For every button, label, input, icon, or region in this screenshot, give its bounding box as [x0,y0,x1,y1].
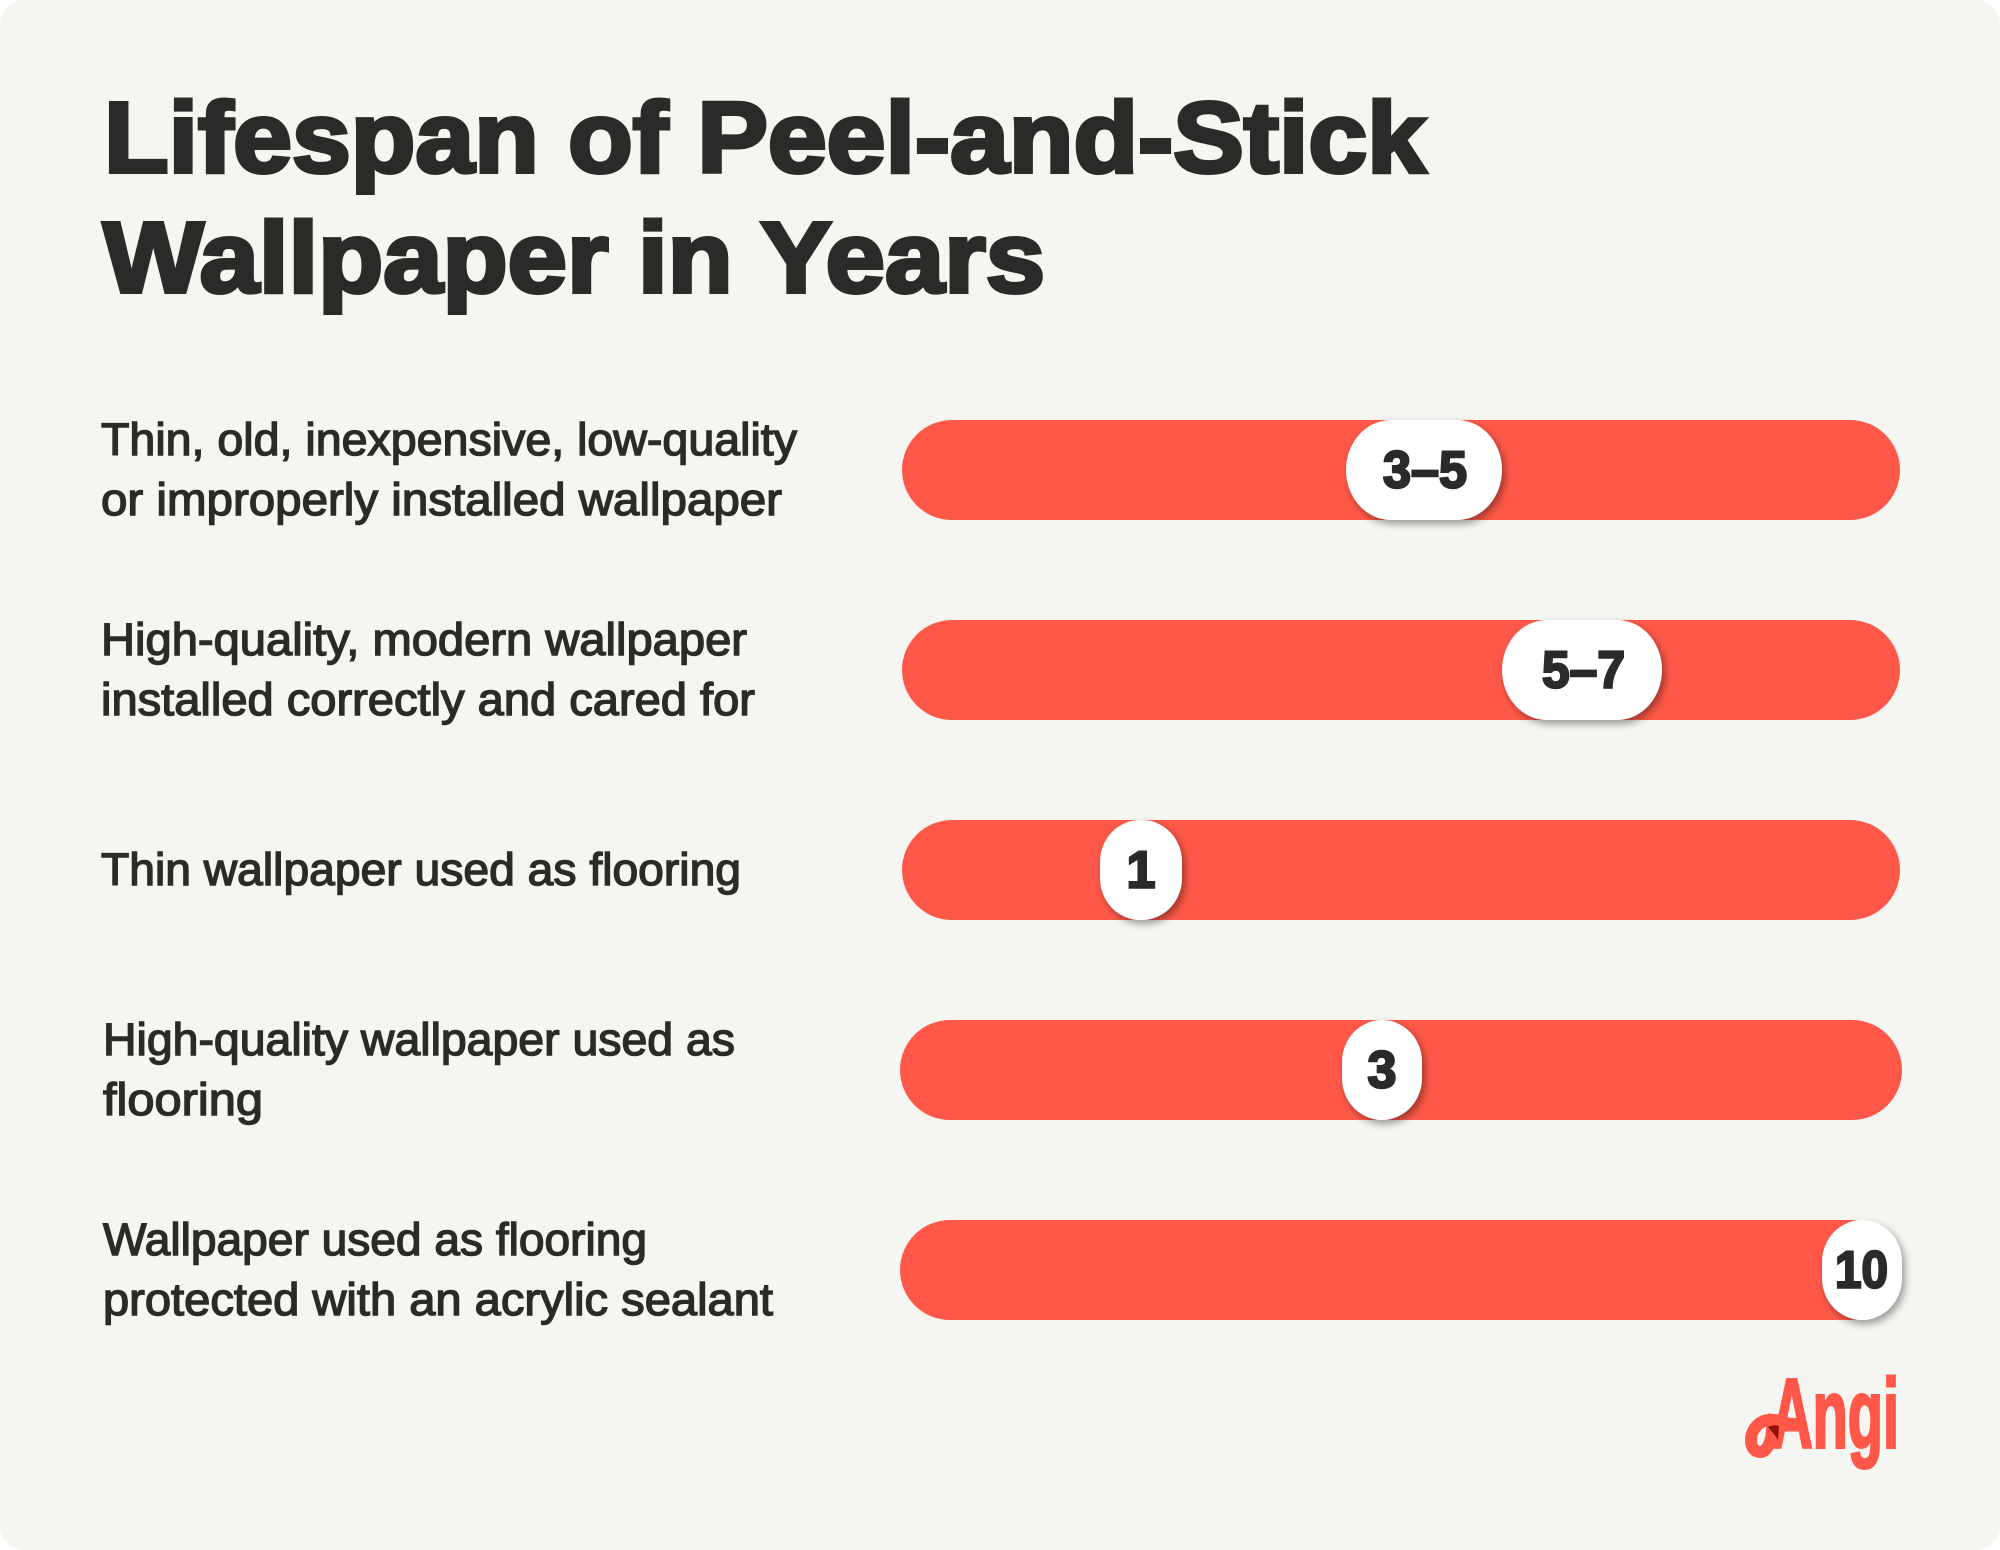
label: row 1 [101,414,798,525]
title [103,82,1426,314]
value pill: 5–7: 5–7 [1542,642,1625,700]
bar: row 3 [902,820,1900,920]
value pill: 3: 3 [1368,1042,1396,1100]
bar: row 1 [902,420,1900,520]
label: row 2 [101,614,755,725]
value pill: 10 [1822,1220,1902,1320]
logo: Angi: Angi [1771,1358,1899,1468]
value pill: 1 [1100,820,1182,920]
value pill: 1: 1 [1127,842,1155,900]
label: row 5: Wallpaper used as flooring [103,1214,647,1265]
row 2: high-quality modern wallpaper [101,614,1900,725]
bar: row 5 [900,1220,1902,1320]
row 1: thin low-quality wallpaper [101,414,1900,525]
label: row 2: installed correctly and cared for [101,674,755,725]
value pill: 3–5 [1346,420,1502,520]
value pill: 3–5: 3–5 [1383,442,1467,500]
bar: row 2 [902,620,1900,720]
label: row 1: or improperly installed wallpaper [101,474,782,525]
row 3: thin wallpaper as flooring [101,820,1900,920]
bar: row 4 [900,1020,1902,1120]
title: Lifespan of Peel-and-Stick [104,82,1426,194]
row 4: high-quality wallpaper as flooring [103,1014,1902,1125]
label: row 3: Thin wallpaper used as flooring [101,844,741,895]
value pill: 5–7 [1502,620,1662,720]
title: Wallpaper in Years [103,202,1045,314]
label: row 4 [103,1014,735,1125]
row 5: wallpaper as flooring with sealant [103,1214,1902,1325]
value pill: 3 [1342,1020,1422,1120]
logo: Angi [1751,1358,1899,1468]
label: row 5 [103,1214,774,1325]
label: row 4: flooring [103,1074,263,1125]
label: row 2: High-quality, modern wallpaper [101,614,747,665]
label: row 5: protected with an acrylic sealant [103,1274,774,1325]
value pill: 10: 10 [1835,1242,1888,1300]
label: row 1: Thin, old, inexpensive, low-quality [101,414,798,465]
label: row 4: High-quality wallpaper used as [103,1014,735,1065]
